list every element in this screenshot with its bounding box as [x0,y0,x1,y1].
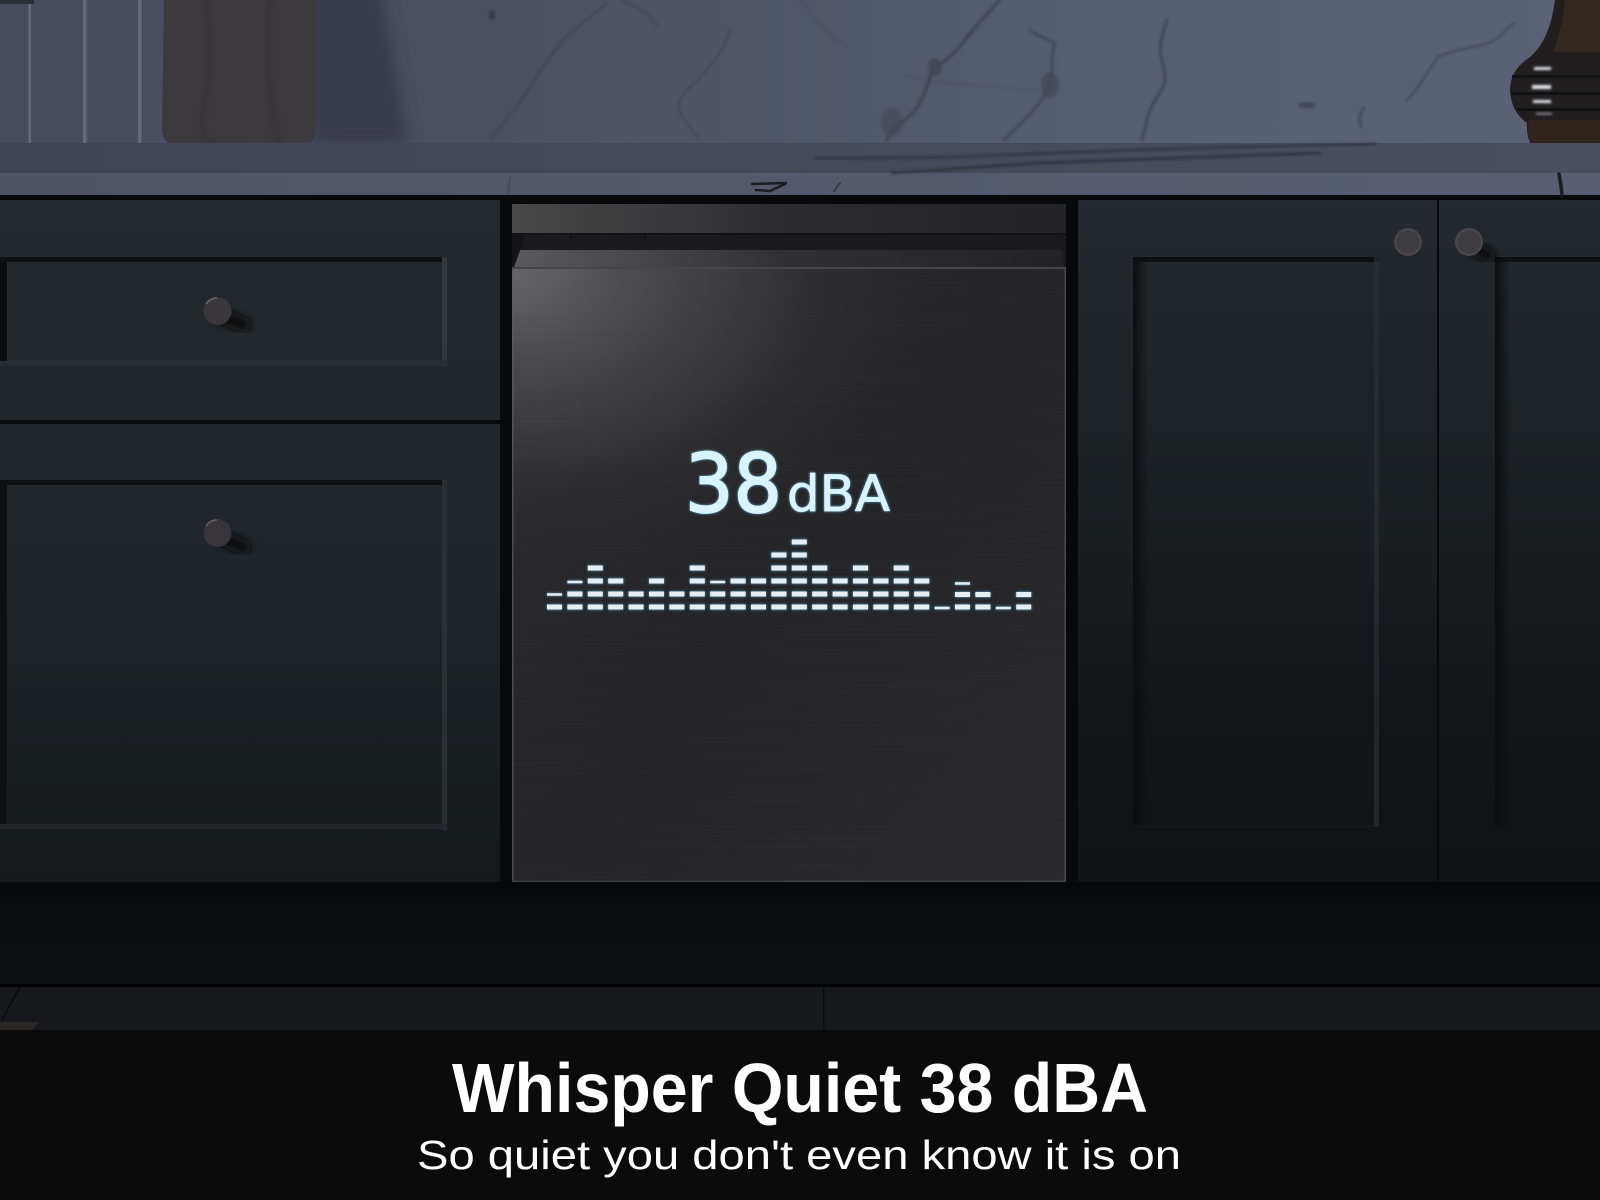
far right cabinet door [1439,200,1600,882]
sound level equalizer bars [547,542,1031,608]
door knob [1394,228,1422,256]
door knob [204,519,243,547]
noise level readout [685,438,890,532]
drawer knob [204,297,243,325]
headline: Whisper Quiet 38 dBA [452,1049,1148,1127]
right cabinet door [1078,200,1437,882]
toe kick [0,883,1600,987]
recessed handle [512,233,1066,269]
caption band [0,1030,1600,1200]
subheading: So quiet you don't even know it is on [417,1132,1181,1178]
cutting board [162,0,408,146]
left lower cabinet door [0,424,500,882]
marble veins [489,0,1514,140]
countertop veins [508,144,1562,195]
vase [1510,0,1600,148]
left upper drawer [0,200,500,420]
control top strip [512,204,1066,233]
cabinet recess backdrop [0,200,1600,883]
door knob [1455,228,1488,256]
door panel [512,269,1066,882]
countertop [0,143,1600,201]
marble backsplash [0,0,1600,146]
wall panel moldings [0,0,163,146]
unit dBA: dBA [787,465,890,523]
dishwasher [512,204,1066,882]
floor [0,987,1600,1030]
number 38: 38 [685,438,782,532]
